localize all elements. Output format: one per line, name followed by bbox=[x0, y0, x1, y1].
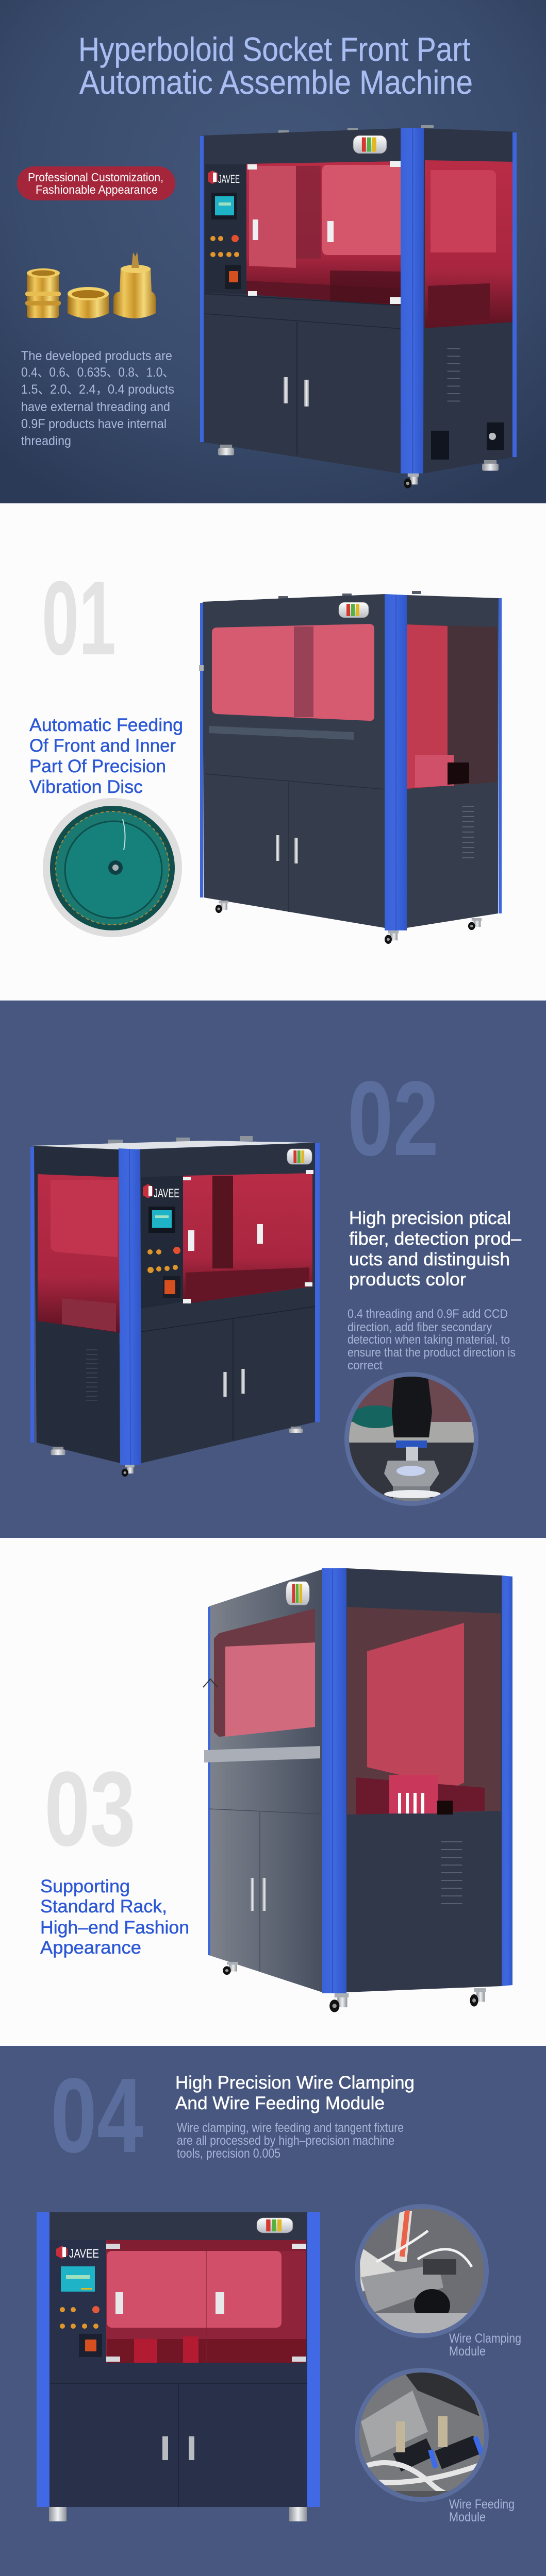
heading: standard rack: Appearance bbox=[40, 1938, 141, 1958]
number 03: 03 bbox=[44, 1750, 136, 1868]
label: wire feeding: Wire Feeding bbox=[449, 2497, 515, 2512]
logo: JAVEE bbox=[154, 1187, 179, 1200]
number 02: 02 bbox=[348, 1059, 439, 1178]
title bbox=[78, 30, 473, 101]
paragraph: developed products: have external threading and bbox=[21, 400, 170, 414]
title: Automatic Assemble Machine bbox=[79, 63, 473, 101]
paragraph: developed products bbox=[21, 349, 174, 448]
logo bbox=[56, 2246, 99, 2261]
paragraph: CCD direction: direction, add fiber secondary bbox=[348, 1320, 492, 1334]
paragraph: machine tools: are all processed by high–precision machine bbox=[177, 2133, 394, 2148]
heading: optical fiber: products color bbox=[349, 1269, 466, 1290]
paragraph: developed products: The developed products are bbox=[21, 349, 172, 363]
heading: automatic feeding: Vibration Disc bbox=[29, 777, 143, 797]
number 04: 04 bbox=[51, 2056, 143, 2175]
paragraph: developed products: 0.9F products have internal bbox=[21, 417, 167, 431]
heading: automatic feeding: Automatic Feeding bbox=[29, 715, 183, 735]
paragraph: machine tools: tools, precision 0.005 bbox=[177, 2146, 280, 2161]
heading: optical fiber: ucts and distinguish bbox=[349, 1249, 510, 1269]
machine: hero view bbox=[200, 125, 517, 488]
image: CCD camera bbox=[344, 1372, 479, 1507]
badge: professional customization bbox=[17, 166, 175, 200]
heading: standard rack bbox=[40, 1876, 189, 1958]
heading: automatic feeding: Part Of Precision bbox=[29, 756, 166, 776]
label: wire clamping: Wire Clamping bbox=[449, 2331, 521, 2346]
heading: wire clamping: And Wire Feeding Module bbox=[175, 2093, 385, 2113]
paragraph: CCD direction: 0.4 threading and 0.9F add CCD bbox=[348, 1307, 508, 1321]
image: wire feeding module bbox=[355, 2368, 490, 2506]
paragraph: CCD direction: detection when taking material, to bbox=[348, 1333, 510, 1347]
number 01: 01 bbox=[42, 560, 116, 677]
heading: optical fiber: fiber, detection prod– bbox=[349, 1229, 522, 1249]
heading: automatic feeding: Of Front and Inner bbox=[29, 736, 176, 756]
paragraph: developed products: 1.5、2.0、2.4，0.4 products bbox=[21, 382, 174, 397]
image: gold socket parts bbox=[25, 251, 156, 318]
heading: standard rack: High–end Fashion bbox=[40, 1918, 189, 1938]
image: wire clamping module bbox=[355, 2204, 490, 2344]
machine: front left view bbox=[30, 1136, 320, 1477]
heading: optical fiber bbox=[349, 1208, 522, 1290]
label: wire feeding: Module bbox=[449, 2510, 486, 2524]
heading: automatic feeding bbox=[29, 715, 183, 797]
logo bbox=[208, 171, 240, 185]
panel: feature 01 bbox=[0, 503, 546, 1001]
label: wire feeding bbox=[449, 2497, 515, 2524]
logo: JAVEE bbox=[218, 173, 240, 185]
label: wire clamping bbox=[449, 2331, 521, 2359]
panel: feature 03 bbox=[0, 1538, 546, 2046]
heading: wire clamping bbox=[175, 2073, 415, 2113]
label: wire clamping: Module bbox=[449, 2344, 486, 2359]
badge: professional customization: Fashionable Appearance bbox=[36, 183, 158, 196]
paragraph: machine tools: Wire clamping, wire feeding and tangent fixture bbox=[177, 2121, 404, 2135]
image: vibration disc bbox=[43, 798, 182, 937]
logo: JAVEE bbox=[69, 2247, 99, 2261]
panel: feature 02 bbox=[0, 1001, 546, 1538]
paragraph: CCD direction: correct bbox=[348, 1359, 383, 1372]
logo bbox=[143, 1184, 179, 1200]
heading: wire clamping: High Precision Wire Clamping bbox=[175, 2073, 415, 2093]
panel: hero bbox=[0, 0, 546, 503]
paragraph: machine tools bbox=[177, 2121, 404, 2161]
machine: front view bbox=[37, 2212, 320, 2521]
paragraph: developed products: threading bbox=[21, 434, 71, 448]
paragraph: CCD direction bbox=[348, 1307, 516, 1372]
title: Hyperboloid Socket Front Part bbox=[78, 30, 470, 68]
panel: feature 04 bbox=[0, 2046, 546, 2576]
heading: optical fiber: High precision ptical bbox=[349, 1208, 511, 1228]
heading: standard rack: Standard Rack, bbox=[40, 1896, 167, 1917]
paragraph: developed products: 0.4、0.6、0.635、0.8、1.0、 bbox=[21, 365, 174, 380]
machine: side view bbox=[203, 1568, 512, 2012]
paragraph: CCD direction: ensure that the product direction is bbox=[348, 1346, 516, 1360]
badge: professional customization: Professional Customization, bbox=[28, 171, 163, 184]
machine: rear view bbox=[199, 591, 502, 944]
heading: standard rack: Supporting bbox=[40, 1876, 130, 1896]
